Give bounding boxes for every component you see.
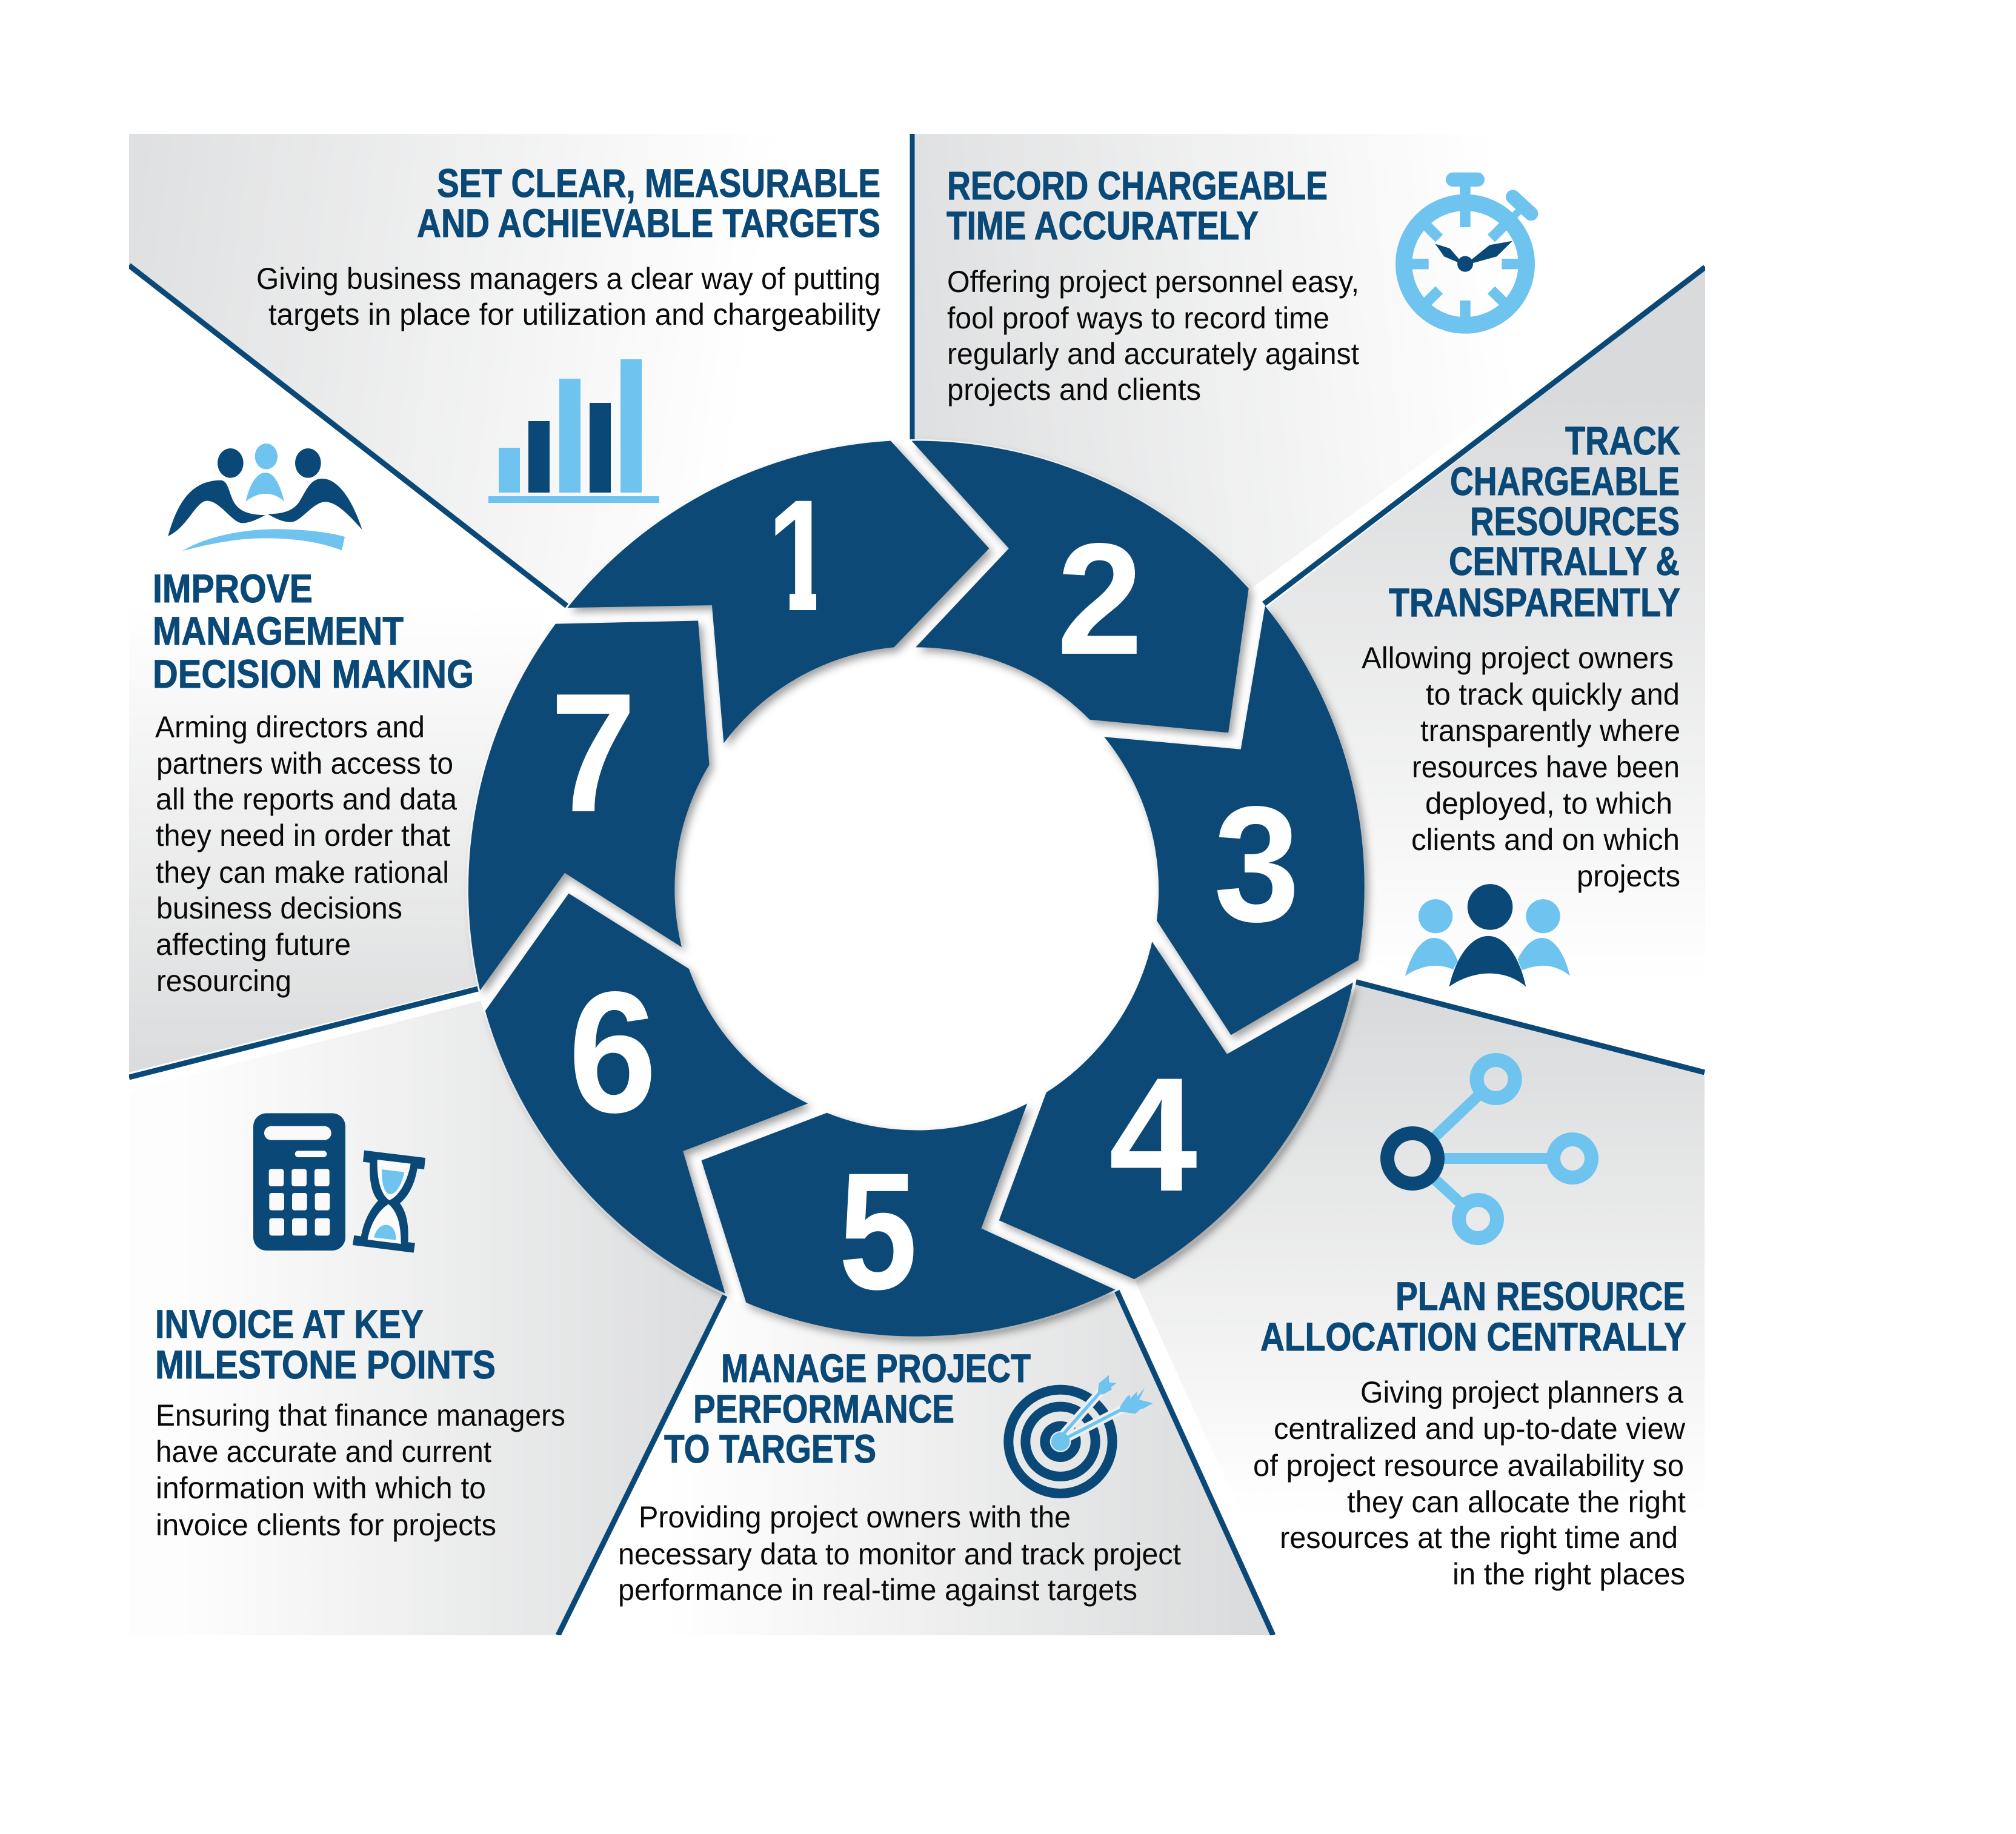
text block: step 2: Offering project personnel easy, xyxy=(947,265,1359,299)
numbers 1 to 7: 3 xyxy=(1214,772,1300,956)
text block: step 1: Giving business managers a clear way of putting xyxy=(256,262,880,296)
heading: step 4 xyxy=(1260,1274,1686,1359)
icon: management group xyxy=(168,444,362,551)
text block: step 3: resources have been xyxy=(1412,750,1680,784)
heading: step 7: MANAGEMENT xyxy=(153,608,404,653)
text block: step 2: fool proof ways to record time xyxy=(947,301,1329,335)
panel: step 2 record chargeable time xyxy=(913,134,1705,589)
panel: step 7 improve decision making xyxy=(129,444,503,1080)
numbers 1 to 7: 5 xyxy=(839,1138,917,1324)
heading: step 5 xyxy=(664,1346,1031,1471)
heading: step 3: RESOURCES xyxy=(1470,499,1680,543)
panel: step 5 manage project performance xyxy=(558,1289,1273,1635)
text block: step 4: in the right places xyxy=(1452,1557,1685,1591)
text block: step 7: resourcing xyxy=(156,964,291,998)
text block: step 6: invoice clients for projects xyxy=(156,1508,496,1542)
text block: step 7: they can make rational xyxy=(156,856,449,889)
icon: bar chart xyxy=(488,359,659,503)
text block: step 7: partners with access to xyxy=(156,746,453,780)
text block: step 1 xyxy=(256,262,880,331)
text block: step 4: Giving project planners a xyxy=(1360,1375,1683,1409)
numbers 1 to 7: 1 xyxy=(767,467,834,644)
text block: step 7: they need in order that xyxy=(156,819,450,852)
text block: step 4: of project resource availability so xyxy=(1253,1449,1684,1483)
heading: step 6: MILESTONE POINTS xyxy=(155,1342,496,1387)
text block: step 7: affecting future xyxy=(156,928,351,962)
text block: step 7: Arming directors and xyxy=(155,710,425,744)
heading: step 4: PLAN RESOURCE xyxy=(1396,1274,1685,1318)
heading: step 5: MANAGE PROJECT xyxy=(721,1346,1031,1390)
text block: step 2 xyxy=(947,265,1359,407)
heading: step 3: CENTRALLY & xyxy=(1449,539,1680,583)
numbers 1 to 7: 6 xyxy=(568,956,657,1149)
heading: step 5: PERFORMANCE xyxy=(693,1386,954,1431)
icon: stopwatch xyxy=(1404,173,1531,325)
text block: step 7 xyxy=(155,710,457,998)
heading: step 5: TO TARGETS xyxy=(664,1426,876,1471)
segment 4 xyxy=(999,942,1353,1279)
text block: step 4: they can allocate the right xyxy=(1347,1485,1686,1519)
text block: step 3 xyxy=(1362,641,1680,893)
text block: step 3: projects xyxy=(1577,859,1680,893)
chart: seven step ring xyxy=(468,441,1365,1337)
numbers 1 to 7: 4 xyxy=(1109,1043,1199,1225)
text block: step 2: projects and clients xyxy=(947,373,1201,407)
text block: step 7: all the reports and data xyxy=(156,782,457,816)
heading: step 1 xyxy=(417,161,880,245)
heading: step 3: TRACK xyxy=(1565,418,1680,463)
segment 5 xyxy=(702,1103,1116,1337)
text block: step 4: resources at the right time and xyxy=(1280,1521,1678,1555)
heading: step 7: IMPROVE xyxy=(153,566,313,611)
text block: step 3: clients and on which xyxy=(1411,823,1680,857)
heading: step 7: DECISION MAKING xyxy=(153,651,474,696)
segment 2 xyxy=(911,441,1249,733)
numbers 1 to 7: 2 xyxy=(1057,510,1143,688)
heading: step 4: ALLOCATION CENTRALLY xyxy=(1260,1314,1686,1359)
heading: step 2: TIME ACCURATELY xyxy=(946,203,1259,248)
text block: step 5: Providing project owners with the xyxy=(639,1500,1071,1534)
heading: step 6 xyxy=(155,1301,496,1387)
text block: step 3: deployed, to which xyxy=(1425,786,1672,820)
heading: step 3 xyxy=(1389,418,1680,625)
icon: resource network xyxy=(1388,1060,1591,1238)
numbers 1 to 7: 7 xyxy=(550,659,636,848)
heading: step 1: AND ACHIEVABLE TARGETS xyxy=(417,201,880,245)
text block: step 5: necessary data to monitor and track project xyxy=(618,1537,1181,1571)
text block: step 7: business decisions xyxy=(156,891,402,925)
segment 7 xyxy=(468,620,709,991)
panel: step 4 plan resource allocation xyxy=(1134,982,1705,1635)
heading: step 1: SET CLEAR, MEASURABLE xyxy=(437,161,880,205)
text block: step 6: Ensuring that finance managers xyxy=(156,1398,565,1432)
text block: step 5 xyxy=(618,1500,1181,1607)
heading: step 7 xyxy=(153,566,474,696)
panel: step 6 invoice at milestones xyxy=(129,1000,727,1635)
heading: step 3: CHARGEABLE xyxy=(1450,459,1680,503)
text block: step 3: transparently where xyxy=(1420,714,1680,748)
numbers 1 to 7 xyxy=(550,467,1300,1324)
text block: step 4: centralized and up-to-date view xyxy=(1274,1412,1686,1446)
icon: team of people xyxy=(1405,884,1570,987)
segment 6 xyxy=(485,893,808,1294)
text block: step 6: information with which to xyxy=(156,1471,486,1505)
panel: step 1 set clear targets xyxy=(129,134,910,607)
text block: step 1: targets in place for utilization and chargeability xyxy=(268,297,880,331)
segment 1 xyxy=(567,441,989,743)
text block: step 2: regularly and accurately against xyxy=(947,337,1359,371)
heading: step 2: RECORD CHARGEABLE xyxy=(947,163,1328,208)
text block: step 6: have accurate and current xyxy=(156,1435,491,1469)
segment 3 xyxy=(1104,606,1365,1035)
text block: step 3: Allowing project owners xyxy=(1362,641,1674,675)
ring backing xyxy=(467,439,1366,1338)
text block: step 3: to track quickly and xyxy=(1426,677,1680,711)
heading: step 3: TRANSPARENTLY xyxy=(1389,580,1680,625)
text block: step 6 xyxy=(156,1398,565,1542)
panel: step 3 track chargeable resources xyxy=(1263,267,1705,1062)
icon: calculator and hourglass xyxy=(253,1113,425,1253)
text block: step 4 xyxy=(1253,1375,1686,1591)
icon: target with arrows xyxy=(1008,1375,1153,1493)
heading: step 6: INVOICE AT KEY xyxy=(155,1301,424,1346)
text block: step 5: performance in real-time against targets xyxy=(618,1573,1137,1607)
heading: step 2 xyxy=(946,163,1328,248)
